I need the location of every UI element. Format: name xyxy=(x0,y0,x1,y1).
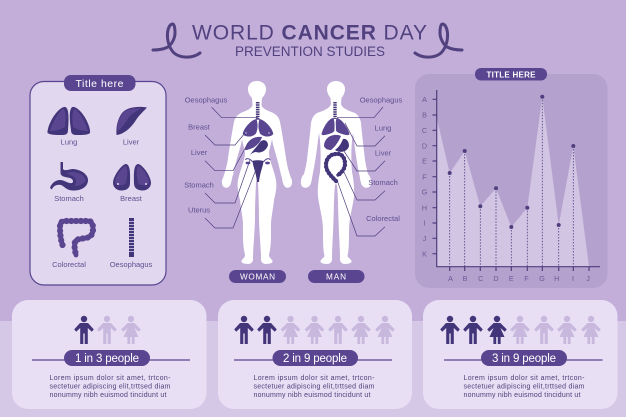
description: nonummy nibh euismod tincidunt ut xyxy=(50,392,167,399)
organ: oesophagus man xyxy=(333,102,337,119)
pill: WOMAN: WOMAN xyxy=(240,273,275,282)
x axis labels: G xyxy=(539,274,545,283)
x axis labels: F xyxy=(524,274,529,283)
description: Lorem ipsum dolor sit amet, trtcon- xyxy=(254,375,375,382)
x axis labels: C xyxy=(478,274,483,283)
y axis labels: H xyxy=(422,203,427,212)
description xyxy=(254,375,375,399)
stat rule xyxy=(444,359,602,361)
icon: liver xyxy=(116,107,147,135)
x axis labels: B xyxy=(463,274,468,283)
organ: oesophagus woman xyxy=(256,102,260,120)
chart area xyxy=(437,97,589,267)
organ: breasts woman xyxy=(243,119,273,137)
x axis labels xyxy=(448,274,590,283)
chart points xyxy=(448,95,575,229)
stat pill: 2 in 9 people xyxy=(283,353,347,365)
chart heading: TITLE HERE xyxy=(475,68,547,80)
panel heading: Title here: Title here xyxy=(76,78,124,90)
labels: man: Colorectal xyxy=(366,214,400,223)
y axis labels: E xyxy=(422,157,427,166)
icon: breast xyxy=(113,164,151,191)
leader lines: woman xyxy=(205,107,258,228)
x axis labels: A xyxy=(448,274,453,283)
description xyxy=(464,375,585,399)
icon: oesophagus xyxy=(129,218,134,257)
y axis labels: D xyxy=(422,141,427,150)
labels: man: Stomach xyxy=(368,178,398,187)
pictogram: 3 of 9 xyxy=(440,316,601,344)
y axis labels: I xyxy=(424,219,426,228)
pill: WOMAN xyxy=(229,270,286,283)
pill: MAN: MAN xyxy=(326,273,346,282)
description xyxy=(50,375,171,399)
description: Lorem ipsum dolor sit amet, trtcon- xyxy=(50,375,171,382)
description: Lorem ipsum dolor sit amet, trtcon- xyxy=(464,375,585,382)
labels: man: Oesophagus xyxy=(360,96,403,104)
description: nonummy nibh euismod tincidunt ut xyxy=(464,392,581,399)
y axis labels: G xyxy=(422,188,428,197)
organ: lungs man xyxy=(322,118,350,135)
x axis labels: I xyxy=(572,274,574,283)
chart axes xyxy=(432,90,600,271)
panel: line chart xyxy=(415,68,608,288)
label: Liver: Liver xyxy=(123,138,140,146)
labels: woman xyxy=(184,96,228,214)
labels: man: Liver xyxy=(375,148,392,158)
label: Breast: Breast xyxy=(120,194,143,203)
stat pill xyxy=(481,350,567,366)
labels: woman: Oesophagus xyxy=(185,96,228,104)
label: Stomach: Stomach xyxy=(54,194,84,203)
description: nonummy nibh euismod tincidunt ut xyxy=(254,392,371,399)
x axis labels: J xyxy=(586,274,590,283)
panel: 3 in 9 people xyxy=(423,300,618,409)
pictogram: 1 of 3 xyxy=(74,316,141,344)
stat pill: 3 in 9 people xyxy=(492,353,556,365)
description: sectetuer adipiscing elit,trttsed diam xyxy=(464,384,585,390)
labels: woman: Uterus xyxy=(188,206,210,214)
panel: organs xyxy=(30,75,166,285)
x axis labels: D xyxy=(493,274,499,283)
stat rule xyxy=(32,359,190,361)
chart heading: TITLE HERE: TITLE HERE xyxy=(486,70,536,79)
stat pill xyxy=(272,350,358,366)
stat rule xyxy=(234,359,392,361)
y axis labels xyxy=(422,95,428,258)
lower band xyxy=(0,321,626,417)
organ: liver and stomach man xyxy=(324,135,349,152)
y axis labels: C xyxy=(422,126,427,135)
labels: woman: Liver xyxy=(191,148,208,157)
y axis labels: F xyxy=(422,172,427,181)
body silhouette: woman xyxy=(222,81,292,264)
label: Colorectal: Colorectal xyxy=(52,260,86,269)
title xyxy=(192,22,427,59)
panel: 2 in 9 people xyxy=(218,300,412,409)
panel: 1 in 3 people xyxy=(12,300,206,409)
description: sectetuer adipiscing elit,trttsed diam xyxy=(254,384,375,390)
x axis labels: E xyxy=(509,274,514,283)
icon: stomach xyxy=(50,162,88,191)
label: Lung: Lung xyxy=(61,138,77,146)
labels: woman: Stomach xyxy=(184,180,214,190)
stat pill xyxy=(64,350,150,366)
icon: lung xyxy=(47,107,90,135)
title: WORLD CANCER DAY xyxy=(192,22,427,44)
labels: man xyxy=(360,96,403,223)
chart drop lines xyxy=(450,97,573,267)
panel heading: Title here xyxy=(64,75,136,91)
y axis labels: B xyxy=(422,111,427,120)
labels: man: Lung xyxy=(375,124,391,132)
icon: colorectal xyxy=(60,221,93,255)
leader lines: man xyxy=(337,107,385,236)
labels: woman: Breast xyxy=(188,122,211,132)
y axis labels: A xyxy=(422,95,427,104)
y axis labels: K xyxy=(422,249,427,258)
label: Oesophagus: Oesophagus xyxy=(110,260,153,269)
organ: liver and stomach woman xyxy=(245,137,268,155)
x axis labels: H xyxy=(554,274,559,283)
description: sectetuer adipiscing elit,trttsed diam xyxy=(50,384,171,390)
stat pill: 1 in 3 people xyxy=(75,353,139,365)
organ: uterus xyxy=(246,159,270,182)
icon: right ribbon xyxy=(415,24,462,57)
figure: man xyxy=(301,81,403,283)
figure: woman xyxy=(184,81,292,283)
organ: colon man xyxy=(326,154,345,181)
y axis labels: J xyxy=(423,234,427,243)
body silhouette: man xyxy=(301,81,371,264)
pictogram: 2 of 9 xyxy=(234,316,395,344)
pill: MAN xyxy=(308,270,364,283)
subtitle: PREVENTION STUDIES xyxy=(235,44,385,59)
icon: left ribbon xyxy=(153,24,200,57)
